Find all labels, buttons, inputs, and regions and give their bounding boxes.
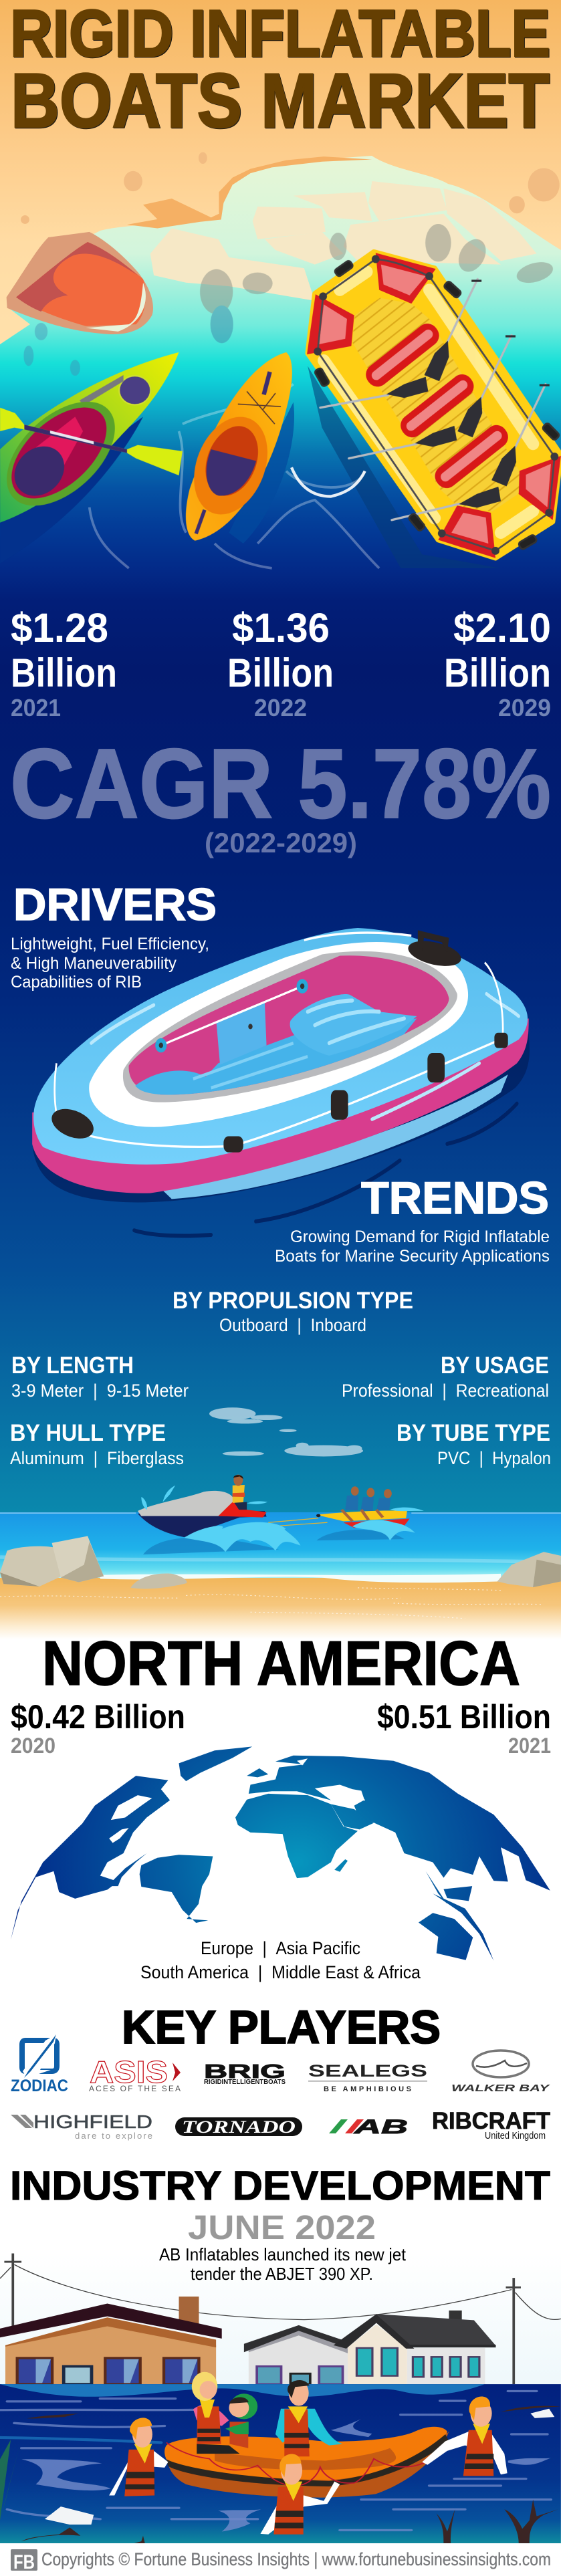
cushion stripes — [308, 1001, 405, 1043]
trends text — [275, 1227, 550, 1266]
trends block — [275, 1173, 550, 1266]
logo: Highfield: dare to explore — [75, 2131, 152, 2141]
inflatable boat illustration — [32, 928, 530, 1236]
market value 2022: $1.36 — [232, 605, 330, 651]
water splashes — [141, 1486, 424, 1552]
water ripples — [0, 2391, 551, 2530]
drivers text: & High Maneuverability — [11, 954, 177, 973]
orange rescue raft — [164, 2427, 449, 2498]
North America value 2020: $0.42 Billion — [11, 1698, 185, 1736]
date: JUNE 2022 — [188, 2208, 376, 2246]
pink interior — [129, 955, 449, 1094]
Madagascar — [334, 1859, 348, 1872]
pink hull band — [32, 1018, 529, 1193]
development description — [159, 2244, 407, 2284]
kayak shadow — [0, 417, 143, 564]
beach rocks left — [0, 1536, 104, 1587]
yellow and red raft — [307, 252, 561, 558]
beach band — [0, 1578, 561, 1639]
raft red end sections — [307, 253, 561, 558]
shadow of raft on water — [308, 366, 501, 568]
UK — [247, 1768, 268, 1777]
segment: length: BY LENGTH — [11, 1353, 134, 1379]
rope eyelets — [155, 979, 308, 1052]
blue seat cushion — [217, 1003, 267, 1064]
rescuer left — [109, 2418, 168, 2496]
drivers text: Lightweight, Fuel Efficiency, — [11, 935, 209, 953]
sea highlights — [0, 1513, 561, 1562]
floating debris — [0, 2406, 561, 2543]
sand grain speckles — [0, 1588, 544, 1619]
water swirl shapes — [21, 2419, 551, 2532]
Australia — [419, 1913, 473, 1960]
submerged stones — [23, 224, 555, 376]
logo: Brig: BRIG — [204, 2061, 286, 2083]
clouds — [209, 1407, 363, 1456]
woman and child in boat — [192, 2372, 257, 2454]
raft rope — [318, 259, 554, 551]
North America value 2021: 2021 — [508, 1734, 551, 1758]
orange kayak — [181, 352, 292, 541]
utility poles and wires — [0, 2254, 561, 2384]
market value 2022 — [227, 605, 334, 721]
boat rope — [55, 933, 503, 1147]
Hudson Bay — [111, 1795, 152, 1820]
orange kayak shadow — [229, 402, 294, 544]
Greenland — [179, 1746, 252, 1781]
logo: Ribcraft: United Kingdom — [485, 2130, 546, 2141]
segment: hull type: BY HULL TYPE — [10, 1420, 166, 1446]
floor tube highlights — [193, 1043, 308, 1088]
beach rock right — [497, 1552, 561, 1587]
North America value 2020: 2020 — [11, 1734, 55, 1758]
raft tube highlights — [324, 271, 533, 533]
rope knots — [314, 255, 558, 555]
flood water — [0, 2384, 561, 2543]
flood scene — [0, 2254, 561, 2543]
segment: length — [11, 1353, 189, 1401]
market value 2029 — [444, 605, 551, 721]
development description: AB Inflatables launched its new jet — [159, 2244, 407, 2264]
drivers block — [11, 879, 217, 991]
logo: AB — [329, 2116, 408, 2138]
logo: Asis: ACES OF THE SEA — [89, 2084, 181, 2093]
logo: Walker Bay — [451, 2051, 551, 2094]
window reflections — [35, 2359, 197, 2383]
segment: usage: BY USAGE — [441, 1353, 549, 1379]
other regions — [140, 1938, 421, 1982]
logo: Highfield — [11, 2111, 152, 2141]
market value 2022: 2022 — [254, 694, 307, 721]
water background — [0, 156, 561, 1518]
logo: Tornado — [175, 2117, 302, 2137]
wet sand edge — [127, 156, 372, 228]
beach scene — [0, 1407, 561, 1619]
segment: length: 3-9 Meter | 9-15 Meter — [11, 1381, 189, 1401]
Eurasia — [249, 1756, 550, 1891]
market value 2021 — [11, 605, 117, 721]
logo: Asis: ASIS — [90, 2055, 168, 2089]
tow rope — [268, 1518, 328, 1526]
white caustic glint — [292, 467, 365, 497]
other regions: South America | Middle East & Africa — [140, 1962, 421, 1982]
other regions: Europe | Asia Pacific — [201, 1938, 360, 1958]
raft body — [308, 252, 561, 558]
market value 2022: Billion — [227, 651, 334, 695]
drivers text: Capabilities of RIB — [11, 973, 142, 991]
logo: Tornado: TORNADO — [182, 2117, 296, 2137]
sky behind houses — [0, 2253, 561, 2384]
market value 2021: 2021 — [11, 694, 61, 721]
key players heading: KEY PLAYERS — [122, 2001, 441, 2053]
logo: Sealegs — [308, 2062, 427, 2093]
logo: Zodiac — [11, 2034, 68, 2095]
market value 2029: 2029 — [498, 694, 551, 721]
logo: Sealegs: BE AMPHIBIOUS — [324, 2085, 411, 2093]
segment: propulsion type: BY PROPULSION TYPE — [173, 1288, 413, 1314]
hatch cover — [119, 376, 150, 404]
shallow water foam — [100, 1574, 501, 1583]
green kayak — [0, 352, 183, 525]
logo: Brig — [204, 2061, 286, 2086]
footer — [11, 2549, 551, 2573]
logo: AB: AB — [353, 2116, 408, 2138]
logo: Sealegs: SEALEGS — [308, 2062, 427, 2081]
water caustics — [90, 384, 379, 568]
white ring — [89, 942, 468, 1127]
segment: usage: Professional | Recreational — [342, 1381, 549, 1401]
raft oars — [320, 279, 550, 520]
trends text: Boats for Marine Security Applications — [275, 1247, 550, 1266]
sand patches under water — [150, 181, 536, 301]
boat wake shadows — [143, 1538, 279, 1554]
logo: Highfield: HIGHFIELD — [33, 2111, 152, 2132]
tube highlights — [91, 993, 519, 1119]
Africa — [235, 1794, 358, 1878]
cockpit — [0, 382, 134, 525]
rescuer front — [260, 2454, 340, 2535]
North America heading: NORTH AMERICA — [42, 1628, 520, 1698]
Arabian peninsula — [331, 1804, 374, 1829]
ripples — [134, 1104, 517, 1236]
segment: propulsion type — [173, 1288, 413, 1335]
drivers text — [11, 935, 209, 991]
title — [10, 0, 550, 144]
sea band — [0, 1512, 561, 1579]
Great Lakes — [109, 1828, 129, 1843]
Southeast Asia islands — [426, 1871, 447, 1904]
jet ski rider — [233, 1485, 245, 1504]
jet ski — [138, 1475, 267, 1537]
Fortune Business Insights logo: FB — [13, 2551, 35, 2573]
drivers heading: DRIVERS — [13, 879, 217, 930]
segment: hull type: Aluminum | Fiberglass — [10, 1448, 184, 1468]
white lower page background — [0, 1639, 561, 2576]
CAGR: (2022-2029) — [205, 827, 357, 858]
development description: tender the ABJET 390 XP. — [191, 2264, 373, 2284]
rescuer right — [422, 2397, 508, 2476]
boat shadow — [32, 1034, 530, 1202]
trends heading: TRENDS — [361, 1173, 549, 1223]
raft thwarts — [362, 319, 443, 391]
North America — [11, 1776, 170, 1940]
logo: Ribcraft: RIBCRAFT — [432, 2108, 550, 2134]
beach rock centre — [130, 1574, 187, 1589]
banana boat — [316, 1486, 410, 1528]
kayak paddle — [0, 408, 183, 475]
white and dark roof house — [334, 2311, 496, 2384]
raft handles — [314, 260, 560, 550]
North America value 2020 — [11, 1698, 185, 1758]
boat black fittings — [49, 930, 508, 1153]
market value 2029: $2.10 — [453, 605, 551, 651]
segment: usage — [342, 1353, 549, 1401]
large red rock — [7, 232, 153, 334]
Central America and Caribbean — [107, 1853, 146, 1886]
Caspian and Baltic seas — [297, 1758, 365, 1801]
sand specks — [21, 152, 560, 224]
logo: Zodiac: ZODIAC — [11, 2077, 68, 2095]
industry development heading: INDUSTRY DEVELOPMENT — [10, 2163, 550, 2208]
world map globe — [11, 1746, 550, 1961]
grey house — [244, 2325, 349, 2384]
segment: tube type — [397, 1420, 551, 1468]
logo: Brig: RIGIDINTELLIGENTBOATS — [204, 2079, 286, 2086]
logo: Walker Bay: WALKER BAY — [451, 2083, 551, 2094]
banana boat riders — [345, 1495, 390, 1511]
segment: hull type — [10, 1420, 184, 1468]
deck plate — [80, 375, 124, 405]
brown house windows — [17, 2358, 199, 2384]
sand background — [0, 0, 561, 415]
raft ribbed floor — [352, 298, 520, 511]
segment: propulsion type: Outboard | Inboard — [219, 1315, 366, 1335]
North America value 2021 — [377, 1698, 551, 1758]
market value 2021: $1.28 — [11, 605, 108, 651]
market value 2021: Billion — [11, 651, 117, 695]
trends text: Growing Demand for Rigid Inflatable — [290, 1227, 550, 1246]
blue upper tube — [33, 928, 528, 1165]
South America — [140, 1855, 213, 1923]
man in boat — [275, 2380, 343, 2456]
blue backrest cushion — [290, 994, 417, 1056]
grey inner rim — [123, 951, 457, 1102]
brown house — [0, 2297, 222, 2384]
beach and rock scene at top — [0, 152, 561, 568]
under hull — [161, 1074, 508, 1199]
blue floor tubes — [135, 1018, 417, 1094]
wave crest — [0, 2384, 485, 2397]
